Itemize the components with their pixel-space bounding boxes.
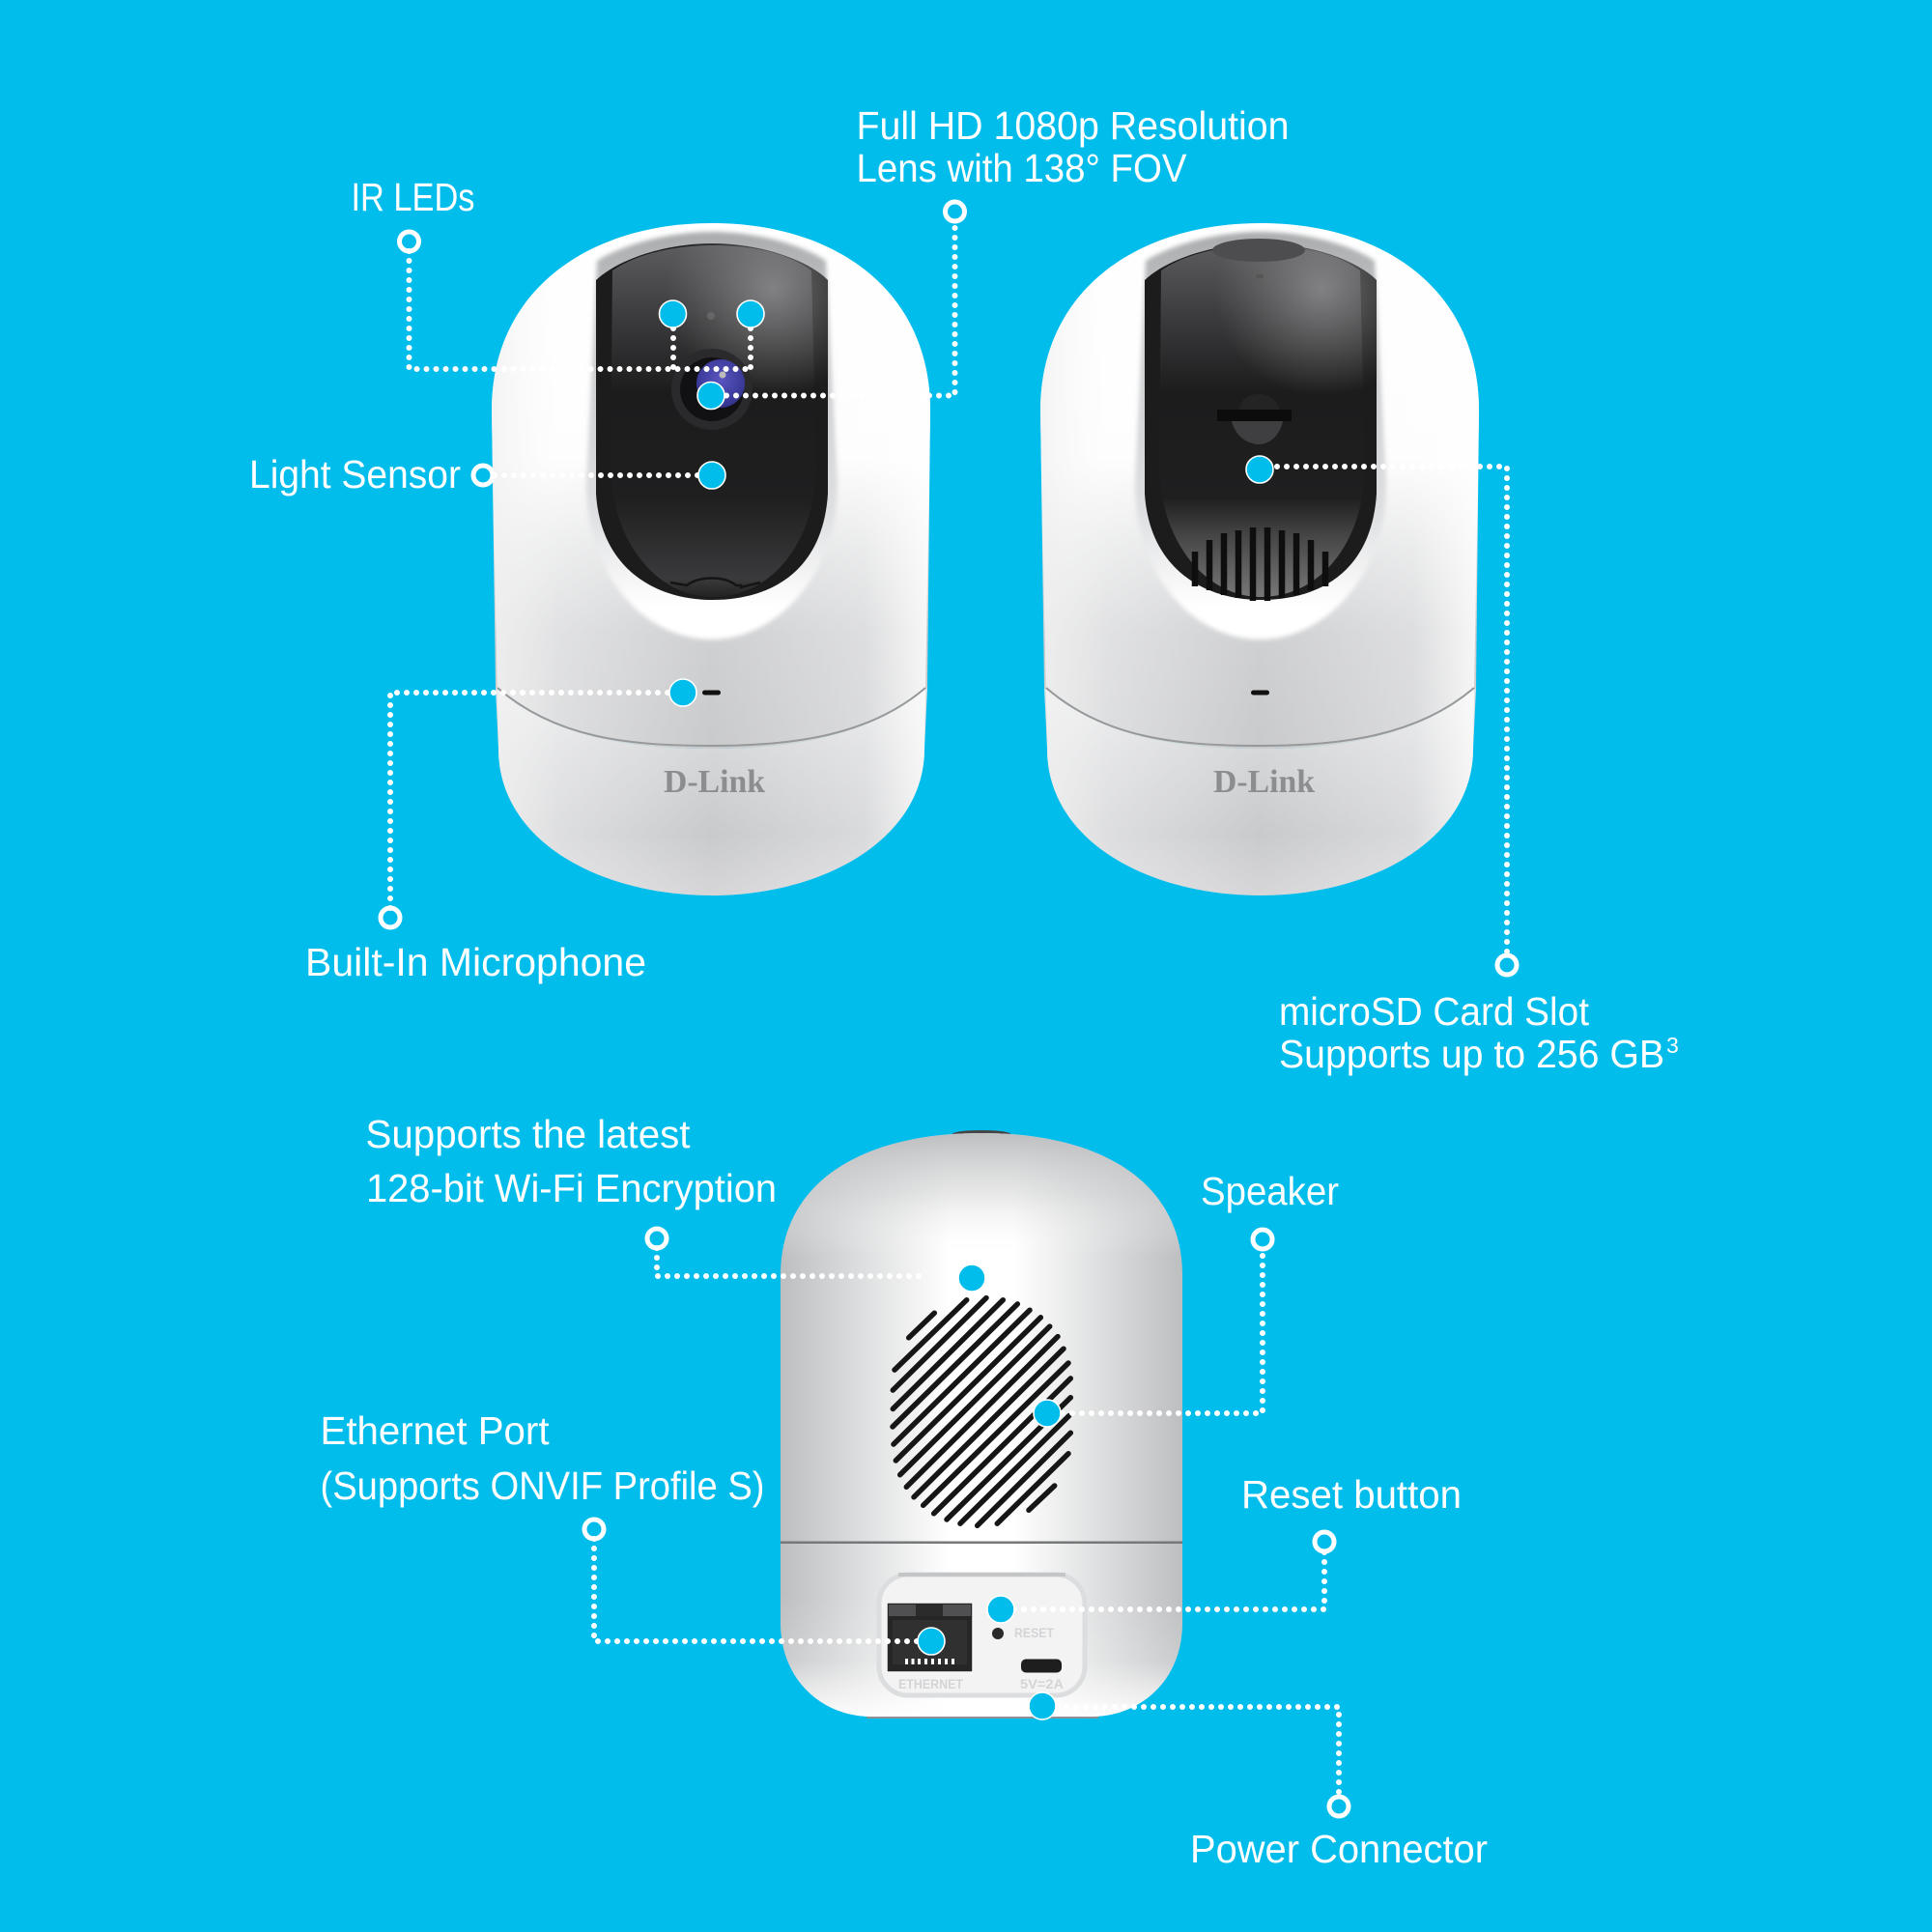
label: microSD: microSD Card Slot bbox=[1279, 989, 1590, 1034]
bottom feet strip bbox=[867, 1714, 1098, 1719]
leader: light sensor bbox=[473, 466, 699, 485]
camera: front view bbox=[492, 223, 930, 895]
label: microSD bbox=[1279, 989, 1679, 1076]
leader: speaker bbox=[1063, 1230, 1272, 1413]
visor bezel bbox=[586, 232, 838, 639]
power label: 5V=2A bbox=[1020, 1677, 1064, 1691]
speaker grille bbox=[893, 1298, 1070, 1525]
hotspots bbox=[659, 300, 1273, 1719]
indicator led bbox=[707, 312, 715, 320]
micro usb port bbox=[1021, 1660, 1062, 1673]
label: lens resolution bbox=[856, 103, 1289, 190]
microphone slit bbox=[702, 690, 721, 696]
reset hole bbox=[992, 1628, 1004, 1639]
camera head body bbox=[1040, 223, 1479, 749]
visor bezel bbox=[1135, 232, 1386, 639]
label: Wi-Fi encryption: Supports the latest bbox=[365, 1112, 691, 1156]
leader: microSD bbox=[1277, 467, 1517, 975]
small indicator bbox=[1256, 274, 1264, 278]
upper body bbox=[781, 1133, 1182, 1542]
logo: D-Link bbox=[664, 764, 765, 800]
speaker vents bbox=[1195, 527, 1325, 601]
label: ethernet: (Supports ONVIF Profile S) bbox=[321, 1463, 765, 1508]
camera head body bbox=[492, 223, 930, 749]
label: Wi-Fi encryption bbox=[365, 1112, 777, 1210]
label: power: Power Connector bbox=[1190, 1827, 1488, 1871]
leader: power bbox=[1057, 1707, 1349, 1816]
camera: back view bbox=[781, 1130, 1182, 1719]
label: lens resolution: Full HD 1080p Resolution bbox=[856, 103, 1289, 148]
visor latch bbox=[670, 578, 760, 587]
reset label: RESET bbox=[1014, 1626, 1055, 1640]
leader: IR LEDs bbox=[400, 232, 752, 369]
label: lens resolution: Lens with 138° FOV bbox=[856, 146, 1187, 190]
leader: Wi-Fi bbox=[647, 1229, 923, 1276]
top lens sliver bbox=[952, 1130, 1010, 1138]
lower body bbox=[781, 1544, 1182, 1717]
label: microSD: 3 bbox=[1666, 1033, 1679, 1058]
label: reset: Reset button bbox=[1241, 1472, 1462, 1517]
label: light sensor: Light Sensor bbox=[249, 452, 461, 497]
visor bbox=[1145, 247, 1377, 600]
ethernet label: ETHERNET bbox=[898, 1677, 964, 1691]
camera base bbox=[496, 688, 927, 895]
lens bbox=[671, 349, 753, 430]
leader: lens bbox=[726, 202, 964, 396]
ethernet port bbox=[887, 1603, 973, 1672]
logo: D-Link bbox=[1213, 764, 1315, 800]
visor bbox=[589, 237, 836, 609]
port panel bbox=[879, 1575, 1085, 1695]
camera: rear-tilted view bbox=[1040, 223, 1479, 895]
top lens bbox=[1212, 239, 1305, 262]
label: ethernet bbox=[321, 1408, 765, 1508]
status slit bbox=[1251, 690, 1269, 696]
camera base bbox=[1044, 688, 1476, 895]
label: Wi-Fi encryption: 128-bit Wi-Fi Encryption bbox=[366, 1166, 777, 1210]
body seam bbox=[781, 1542, 1182, 1544]
label: microphone: Built-In Microphone bbox=[305, 940, 646, 984]
label: ethernet: Ethernet Port bbox=[321, 1408, 550, 1453]
leader: reset bbox=[1014, 1532, 1334, 1609]
leader: ethernet bbox=[584, 1520, 918, 1641]
label: speaker: Speaker bbox=[1201, 1169, 1339, 1213]
label: microSD: Supports up to 256 GB bbox=[1279, 1032, 1664, 1076]
label: IR LEDs: IR LEDs bbox=[352, 175, 475, 219]
leader: microphone bbox=[381, 693, 669, 927]
microSD slot bbox=[1217, 394, 1292, 444]
